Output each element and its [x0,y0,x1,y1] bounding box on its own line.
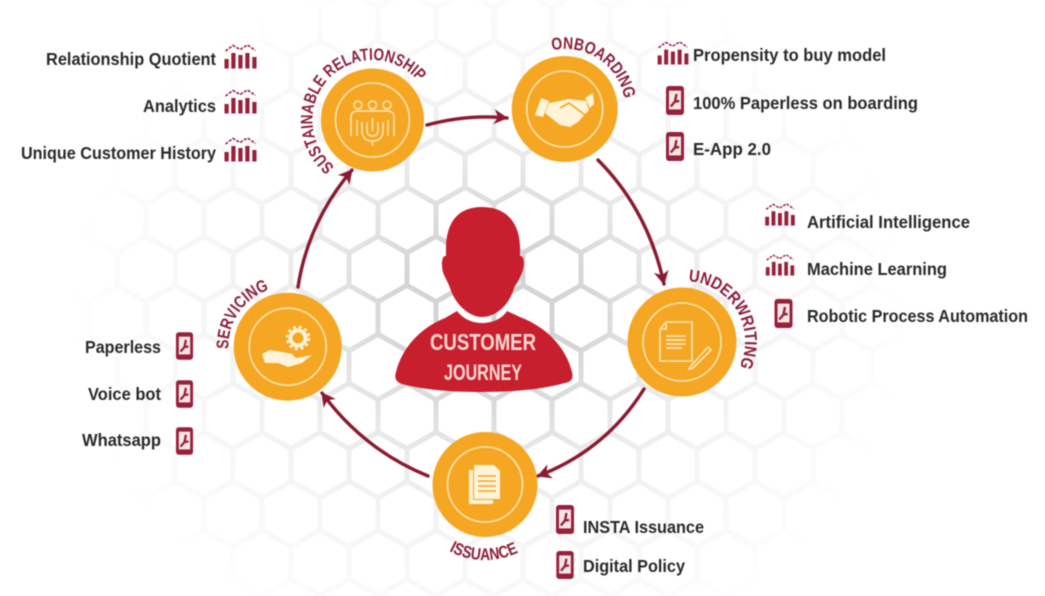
orange disc [512,56,618,162]
item: artificial intelligence: Artificial Intelligence [807,212,970,232]
item: e-app 2.0: E-App 2.0 [693,139,771,159]
label: journey: JOURNEY [444,360,522,385]
arrows: journey cycle [298,117,664,476]
node: servicing [216,280,342,402]
item: artificial intelligence [765,204,970,232]
curved label: servicing: SERVICING [216,280,268,350]
curved label: underwriting: UNDERWRITING [688,268,758,370]
icon: connected people [351,101,394,146]
inner ring [249,308,326,385]
item: propensity to buy model: Propensity to buy model [693,45,886,65]
item: machine learning [766,255,947,279]
item: analytics [143,90,256,116]
arrow: servicing to sustainable relationship [298,170,352,287]
item: insta issuance: INSTA Issuance [583,517,704,537]
arrow: sustainable relationship to onboarding [427,117,507,125]
item: 100% paperless on boarding: 100% Paperless on boarding [693,93,918,113]
label: customer: CUSTOMER [430,329,536,355]
item: insta issuance [556,505,704,537]
item: unique customer history: Unique Customer History [21,143,216,163]
icon: document and pen [660,322,711,369]
item: digital policy: Digital Policy [583,556,685,576]
list: issuance tools [556,505,704,579]
inner ring [448,447,522,522]
orange disc [432,432,538,537]
node: issuance [432,431,538,561]
list: sustainable relationship tools [21,45,256,163]
central customer figure [395,207,573,392]
node: sustainable relationship [300,48,426,174]
curved label: issuance: ISSUANCE [449,540,519,561]
orange disc [321,68,424,172]
icon: hand with gear [290,330,306,346]
shoulders silhouette [395,311,573,392]
item: 100% paperless on boarding [666,86,918,115]
orange disc [234,293,342,401]
background hexagon pattern [195,54,792,559]
item: voice bot: Voice bot [88,384,161,404]
icon: document stack [469,470,493,504]
list: underwriting tools [765,204,1028,328]
inner ring [643,303,721,381]
node: onboarding [510,36,636,163]
item: relationship quotient: Relationship Quotient [46,49,216,69]
item: robotic process automation [774,299,1028,328]
item: paperless: Paperless [85,337,161,357]
icon: handshake [535,93,594,127]
node: underwriting [626,268,758,398]
item: e-app 2.0 [666,132,771,161]
item: whatsapp: Whatsapp [82,430,161,450]
curved label: onboarding: ONBOARDING [551,36,636,98]
item: analytics: Analytics [143,96,216,116]
item: machine learning: Machine Learning [807,259,947,279]
item: robotic process automation: Robotic Process Automation [807,306,1028,326]
curved label: sustainable relationship: SUSTAINABLE RELATIONSHIP [300,48,426,174]
list: servicing tools [82,332,193,455]
list: onboarding tools [658,42,918,161]
item: digital policy [556,551,685,579]
orange disc [628,288,736,396]
inner ring [527,71,603,147]
head silhouette [442,207,524,317]
arrow: issuance to servicing [322,393,428,476]
arrow: onboarding to underwriting [598,160,664,284]
arrow: underwriting to issuance [538,389,644,476]
inner ring [336,83,410,157]
